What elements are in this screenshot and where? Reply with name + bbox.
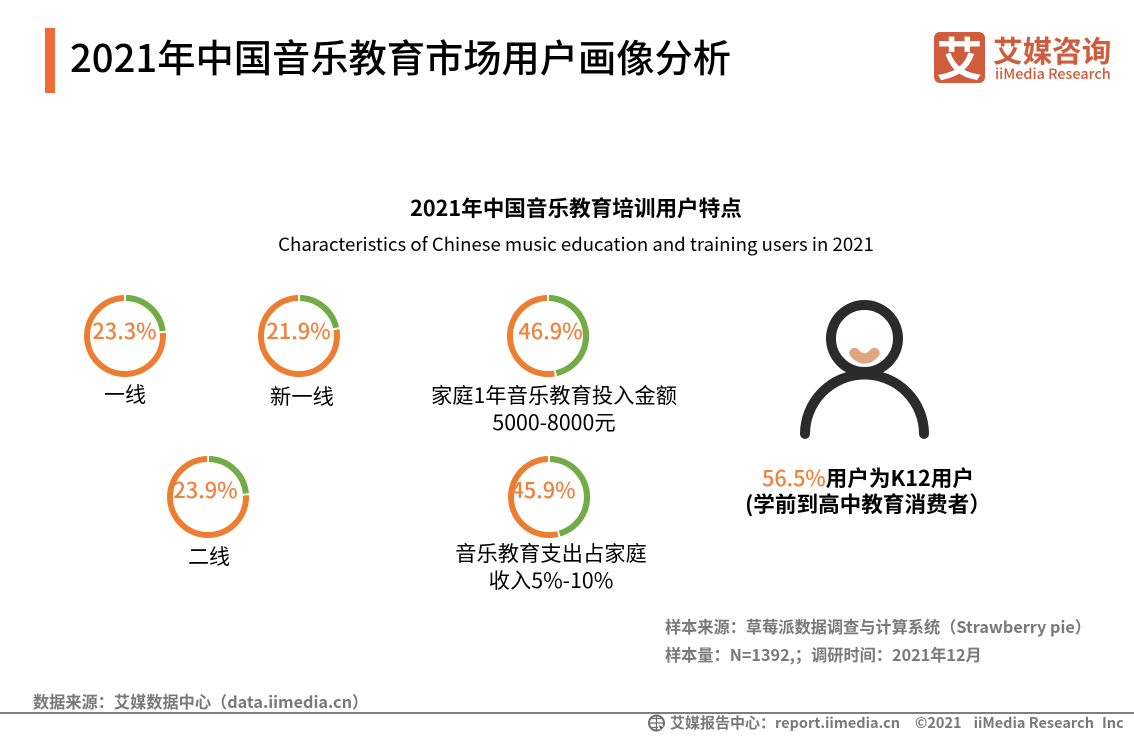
donut: first-tier cities 23.3%	[84, 295, 166, 377]
donut: new first-tier cities 21.9%: 21.9%	[266, 314, 331, 346]
callout: K12 users	[745, 462, 991, 518]
label: family annual spend: 5000-8000元	[492, 406, 616, 437]
sample size note: 样本量：N=1392,；调研时间：2021年12月	[665, 642, 982, 666]
chart heading: 2021年中国音乐教育培训用户特点	[410, 192, 742, 223]
chart subheading: Characteristics of Chinese music education and training users in 2021	[278, 230, 874, 257]
logo: iiMedia: 艾	[936, 24, 982, 90]
data source note: 数据来源：艾媒数据中心（data.iimedia.cn）	[33, 689, 368, 713]
donut: share of household income 45.9%: 45.9%	[511, 474, 576, 505]
footer text: 艾媒报告中心：report.iimedia.cn ©2021 iiMedia Research Inc	[670, 712, 1124, 733]
logo: iiMedia	[934, 24, 1111, 90]
label: share of household income: 音乐教育支出占家庭	[455, 537, 647, 568]
label: family annual spend	[431, 379, 677, 437]
donut: family annual spend 46.9%	[507, 295, 589, 377]
donut: second-tier cities 23.9%	[167, 456, 249, 538]
logo: iiMedia: iiMedia Research	[995, 63, 1111, 84]
callout: K12 users: (学前到高中教育消费者）	[745, 488, 991, 518]
label: second-tier: 二线	[188, 540, 230, 570]
title: 2021年中国音乐教育市场用户画像分析	[70, 28, 731, 84]
label: share of household income	[455, 537, 647, 595]
donut: second-tier cities 23.9%: 23.9%	[173, 474, 238, 505]
callout: K12 users: 56.5%用户为K12用户	[762, 462, 974, 492]
label: share of household income: 收入5%-10%	[489, 564, 613, 595]
sample source note: 样本来源：草莓派数据调查与计算系统（Strawberry pie）	[665, 614, 1091, 638]
donut: share of household income 45.9%	[508, 456, 590, 538]
donut: new first-tier cities 21.9%	[258, 295, 340, 377]
donut: family annual spend 46.9%: 46.9%	[518, 314, 583, 346]
icon: user	[800, 300, 929, 439]
label: first-tier: 一线	[104, 378, 146, 408]
label: family annual spend: 家庭1年音乐教育投入金额	[431, 379, 677, 410]
icon: globe	[648, 714, 665, 732]
label: new first-tier: 新一线	[270, 380, 334, 411]
title accent bar	[45, 28, 55, 93]
donut: first-tier cities 23.3%: 23.3%	[92, 314, 157, 346]
logo: iiMedia: 艾媒咨询	[993, 28, 1111, 71]
